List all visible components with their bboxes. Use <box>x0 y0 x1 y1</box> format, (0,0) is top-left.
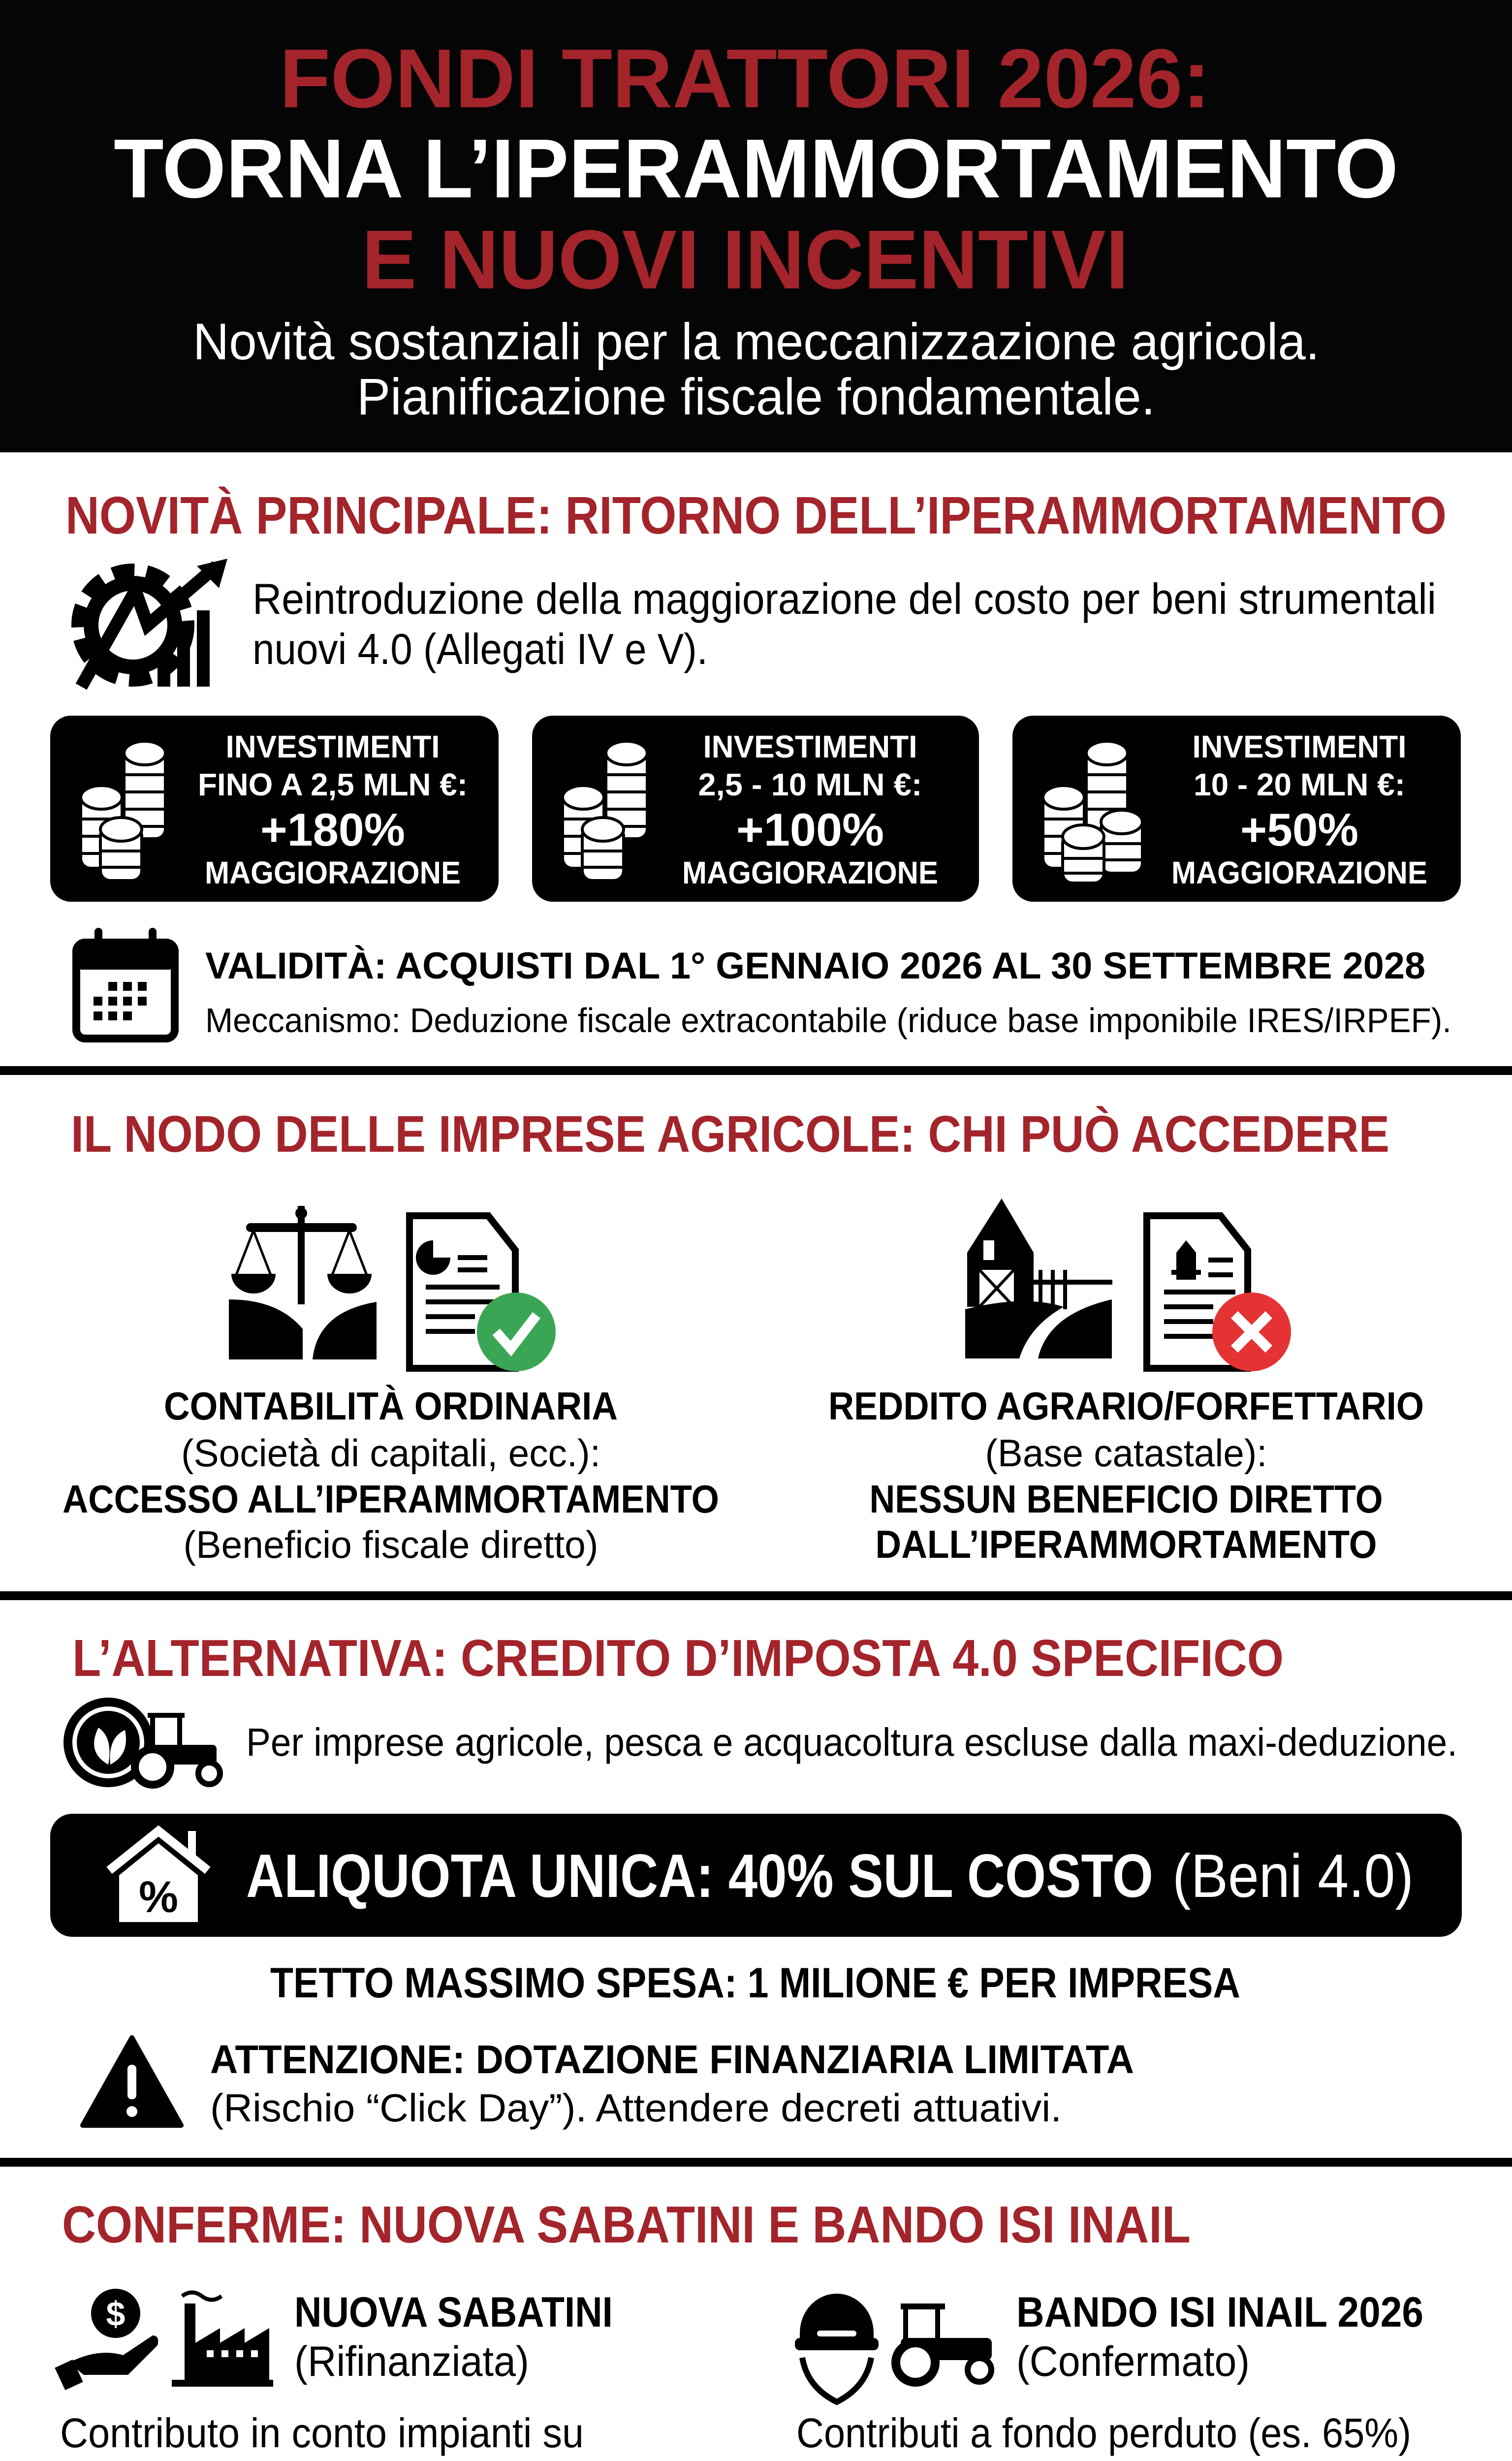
warning text: (Rischio “Click Day”). Attendere decreti attuativi. <box>210 2086 1062 2130</box>
icon: document with check <box>410 1216 556 1371</box>
icon: warning <box>83 2038 181 2125</box>
icon: coins <box>563 741 647 881</box>
title line 3: E NUOVI INCENTIVI <box>362 213 1129 307</box>
icon: hand with coin and factory <box>55 2289 273 2390</box>
panel: box 3 <box>1012 716 1461 902</box>
panel: box 3: INVESTIMENTI <box>1192 729 1407 764</box>
panel: box 1: FINO A 2,5 MLN €: <box>198 767 468 802</box>
panel: agrarian income: NESSUN BENEFICIO DIRETTO <box>869 1477 1383 1521</box>
panel: box 2 <box>532 716 979 902</box>
subtitle: Pianificazione fiscale fondamentale. <box>357 368 1155 426</box>
panel: agrarian income: REDDITO AGRARIO/FORFETTARIO <box>828 1384 1424 1428</box>
icon: helmet and tractor <box>795 2294 992 2402</box>
panel: box 1: INVESTIMENTI <box>225 729 440 764</box>
panel: box 3: 10 - 20 MLN €: <box>1194 767 1405 802</box>
intro text: Reintroduzione della maggiorazione del costo per beni strumentali <box>252 574 1436 623</box>
icon: document with cross <box>1147 1216 1291 1371</box>
warning text <box>210 2037 1134 2130</box>
panel: Bando ISI INAIL <box>795 2289 1470 2461</box>
panel: Nuova Sabatini: Contributo in conto impianti su <box>60 2410 584 2456</box>
section 4 heading: CONFERME: NUOVA SABATINI E BANDO ISI INAIL <box>62 2196 1191 2254</box>
panel: Bando ISI INAIL: BANDO ISI INAIL 2026 <box>1016 2289 1423 2336</box>
panel: ordinary accounting <box>63 1206 719 1566</box>
panel: ordinary accounting: CONTABILITÀ ORDINARIA <box>164 1384 618 1428</box>
panel: box 3: +50% <box>1240 804 1358 855</box>
panel: Bando ISI INAIL: (Confermato) <box>1016 2338 1250 2385</box>
panel: agrarian income: DALL’IPERAMMORTAMENTO <box>875 1522 1377 1566</box>
subtitle <box>193 313 1320 426</box>
section 2 heading: IL NODO DELLE IMPRESE AGRICOLE: CHI PUÒ ACCEDERE <box>71 1105 1389 1163</box>
subtitle: Novità sostanziali per la meccanizzazione agricola. <box>193 313 1320 371</box>
title line 2: TORNA L’IPERAMMORTAMENTO <box>114 122 1398 216</box>
panel: box 1: +180% <box>260 804 405 855</box>
panel: Bando ISI INAIL: Contributi a fondo perduto (es. 65%) <box>796 2410 1411 2456</box>
text: spending cap: TETTO MASSIMO SPESA: 1 MILIONE € PER IMPRESA <box>270 1959 1240 2007</box>
panel: box 2: INVESTIMENTI <box>703 729 917 764</box>
panel: Nuova Sabatini <box>55 2289 709 2461</box>
validity text: Meccanismo: Deduzione fiscale extracontabile (riduce base imponibile IRES/IRPEF). <box>205 1001 1451 1040</box>
icon: coins <box>1043 741 1142 883</box>
header panel <box>0 0 1512 452</box>
icon: house percent: % <box>139 1873 178 1922</box>
validity text: VALIDITÀ: ACQUISTI DAL 1° GENNAIO 2026 AL 30 SETTEMBRE 2028 <box>205 945 1425 987</box>
panel: box 3: MAGGIORAZIONE <box>1171 855 1427 890</box>
panel: rate pill <box>50 1814 1462 1937</box>
intro text: nuovi 4.0 (Allegati IV e V). <box>252 625 708 673</box>
icon: house percent <box>109 1831 208 1922</box>
panel: box 2: 2,5 - 10 MLN €: <box>698 767 922 802</box>
icon: calendar <box>76 928 175 1039</box>
panel: ordinary accounting: (Beneficio fiscale diretto) <box>183 1523 598 1566</box>
validity text <box>205 945 1451 1040</box>
icon: gear with growth chart <box>81 559 227 687</box>
panel: ordinary accounting: ACCESSO ALL’IPERAMMORTAMENTO <box>63 1477 719 1521</box>
icon: barn <box>965 1199 1112 1358</box>
panel: agrarian income: (Base catastale): <box>985 1431 1267 1475</box>
icon: leaf circle and tractor <box>68 1702 220 1785</box>
intro text <box>252 574 1436 673</box>
icon: coins <box>81 741 165 881</box>
panel: agrarian income <box>828 1199 1424 1566</box>
panel: Nuova Sabatini: NUOVA SABATINI <box>294 2289 613 2336</box>
section 3 heading: L’ALTERNATIVA: CREDITO D’IMPOSTA 4.0 SPECIFICO <box>72 1629 1284 1687</box>
panel: box 2: +100% <box>736 804 884 855</box>
panel: rate pill: (Beni 4.0) <box>1172 1842 1414 1910</box>
icon: hand with coin and factory: $ <box>106 2295 125 2333</box>
panel: box 1: MAGGIORAZIONE <box>205 855 461 890</box>
panel: rate pill: ALIQUOTA UNICA: 40% SUL COSTO <box>246 1842 1153 1910</box>
icon: scales and field <box>229 1206 377 1359</box>
warning text: ATTENZIONE: DOTAZIONE FINANZIARIA LIMITATA <box>210 2037 1134 2082</box>
panel: box 1 <box>50 716 499 902</box>
text: eligibility: Per imprese agricole, pesca e acquacoltura escluse dalla maxi-deduzione. <box>246 1720 1457 1764</box>
title line 1: FONDI TRATTORI 2026: <box>280 32 1210 126</box>
panel: Nuova Sabatini: (Rifinanziata) <box>294 2338 529 2385</box>
panel: box 2: MAGGIORAZIONE <box>682 855 938 890</box>
panel: ordinary accounting: (Società di capitali, ecc.): <box>181 1431 600 1475</box>
